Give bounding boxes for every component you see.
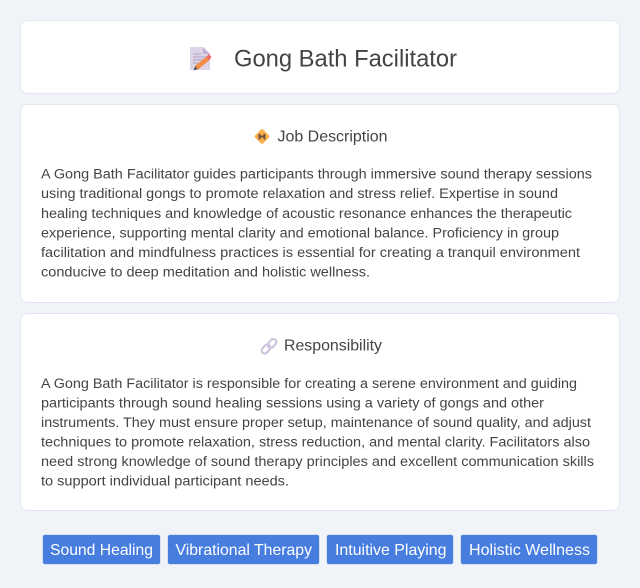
text block: responsibility: techniques to promote relaxation, stress reduction, and mental clarity. Facilitators also — [41, 434, 590, 450]
text block: job description: facilitation and mindfulness practices is essential for creating a tranquil environment — [41, 245, 580, 261]
tag: sound healing — [42, 534, 160, 564]
text block: responsibility: A Gong Bath Facilitator is responsible for creating a serene environment and guiding — [41, 376, 577, 392]
icon: document with pencil — [190, 47, 212, 70]
tag: vibrational therapy: Vibrational Therapy — [176, 542, 312, 559]
heading: job description: Job Description — [278, 129, 388, 146]
panel: title card — [20, 20, 620, 94]
text block: job description — [41, 166, 592, 280]
text block: job description: A Gong Bath Facilitator guides participants through immersive sound therapy sessions — [41, 166, 592, 182]
text block: job description: conducive to deep meditation and holistic wellness. — [41, 264, 370, 280]
tag: intuitive playing — [326, 534, 454, 564]
panel: job description — [20, 104, 620, 302]
tag: vibrational therapy — [168, 534, 320, 564]
text block: responsibility — [41, 376, 594, 490]
tag: sound healing: Sound Healing — [50, 542, 153, 559]
title: Gong Bath Facilitator — [234, 46, 457, 72]
tags row — [42, 534, 598, 564]
text block: responsibility: participants through sound healing sessions using a variety of gongs and other — [41, 396, 544, 412]
heading: responsibility: Responsibility — [284, 338, 382, 355]
tag: intuitive playing: Intuitive Playing — [335, 542, 446, 559]
text block: responsibility: need strong knowledge of sound therapy principles and excellent communication skills — [41, 454, 594, 470]
text block: job description: using traditional gongs to promote relaxation and stress relief. Expertise in sound — [41, 186, 558, 202]
panel: responsibility — [20, 314, 620, 510]
text block: job description: experience, supporting mental clarity and emotional balance. Proficiency in group — [41, 226, 559, 242]
tag: holistic wellness: Holistic Wellness — [469, 542, 590, 559]
icon: chain link — [260, 338, 278, 355]
tag: holistic wellness — [460, 534, 598, 564]
icon: orange diamond — [254, 128, 270, 145]
text block: responsibility: instruments. They must ensure proper setup, maintenance of sound quality, and adjust — [41, 415, 591, 431]
text block: job description: healing techniques and knowledge of acoustic resonance enhances the therapeutic — [41, 206, 572, 222]
text block: responsibility: to support individual participant needs. — [41, 474, 289, 490]
